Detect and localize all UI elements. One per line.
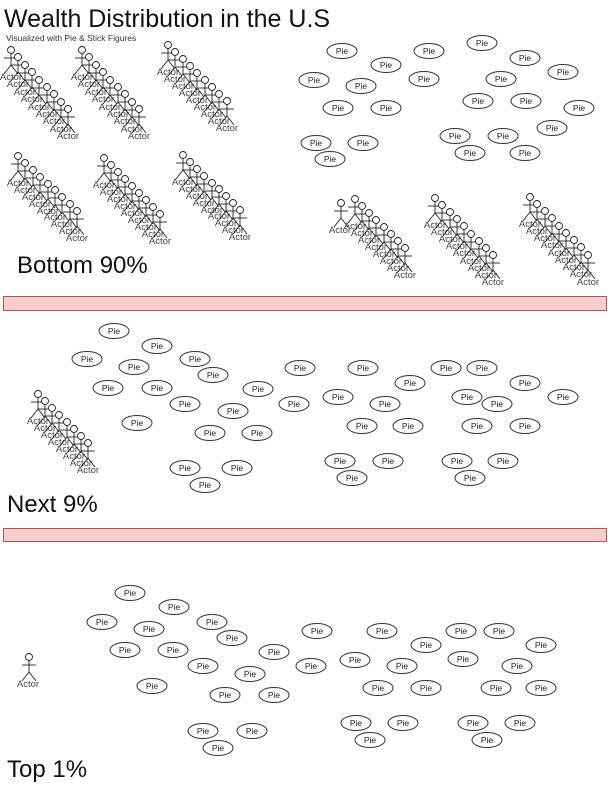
pies top 1%: Pie — [372, 683, 384, 693]
actors group 2: Actor — [121, 124, 143, 135]
pies top 1%: Pie — [376, 626, 388, 636]
pies top 1%: Pie — [420, 640, 432, 650]
pies next 9%: Pie — [294, 363, 306, 373]
pies next 9%: Pie — [252, 384, 264, 394]
pies top 1%: Pie — [146, 681, 158, 691]
pies next 9%: Pie — [519, 421, 531, 431]
pies next 9%: Pie — [451, 456, 463, 466]
pies bottom 90%: Pie — [464, 148, 476, 158]
actors group 9: Actor — [526, 226, 548, 237]
pies next 9%: Pie — [199, 480, 211, 490]
actor single right — [329, 200, 351, 236]
actors group 4: Actor — [37, 206, 59, 217]
pies next 9%: Pie — [288, 399, 300, 409]
actors group 9: Actor — [541, 240, 563, 251]
actors group 6: Actor — [215, 218, 237, 229]
actors group 5: Actor — [121, 208, 143, 219]
actors group 5: Actor — [114, 201, 136, 212]
actors group 8: Actor — [446, 241, 468, 252]
actors group 6: Actor — [172, 177, 194, 188]
label: Top 1%: Top 1% — [7, 756, 87, 783]
pies next 9%: Pie — [402, 421, 414, 431]
pies next 9%: Pie — [497, 456, 509, 466]
pies top 1%: Pie — [535, 683, 547, 693]
pies bottom 90%: Pie — [324, 154, 336, 164]
actors group 2: Actor — [78, 79, 100, 90]
actors group 2: Actor — [128, 131, 150, 142]
pies top 1%: Pie — [212, 743, 224, 753]
actors group 9: Actor — [519, 219, 541, 230]
pies next 9%: Pie — [519, 378, 531, 388]
actors group 2: Actor — [71, 72, 93, 83]
actors group 3 — [157, 42, 238, 134]
divider band 1 — [4, 296, 606, 310]
actors group 5: Actor — [100, 187, 122, 198]
pies bottom 90%: Pie — [380, 60, 392, 70]
actors group 7: Actor — [344, 221, 366, 232]
pies top 1%: Pie — [349, 655, 361, 665]
pies bottom 90%: Pie — [519, 148, 531, 158]
pies top 1%: Pie — [124, 588, 136, 598]
pies next 9%: Pie — [251, 428, 263, 438]
actors group 2: Actor — [92, 94, 114, 105]
actors group 2 — [71, 46, 150, 142]
pies top 1%: Pie — [167, 645, 179, 655]
pies top 1%: Pie — [119, 645, 131, 655]
pies next 9%: Pie — [557, 392, 569, 402]
pies next 9%: Pie — [204, 428, 216, 438]
actors group 7: Actor — [394, 270, 416, 281]
label: Bottom 90%: Bottom 90% — [17, 252, 148, 279]
pies top 1%: Pie — [397, 718, 409, 728]
actors group 9: Actor — [577, 277, 599, 288]
actors group 7: Actor — [351, 228, 373, 239]
pies next 9%: Pie — [231, 463, 243, 473]
pies bottom 90%: Pie — [308, 75, 320, 85]
actors group 6: Actor — [222, 225, 244, 236]
actors group 3: Actor — [194, 102, 216, 113]
actors group 7: Actor — [358, 235, 380, 246]
actors group 6: Actor — [201, 205, 223, 216]
pies next 9%: Pie — [382, 456, 394, 466]
actors group 1: Actor — [43, 116, 65, 127]
actors group 2: Actor — [85, 87, 107, 98]
actors group 5: Actor — [93, 180, 115, 191]
actors group 8: Actor — [431, 227, 453, 238]
pies bottom 90%: Pie — [472, 96, 484, 106]
pies bottom 90%: Pie — [418, 74, 430, 84]
pies next 9%: Pie — [476, 363, 488, 373]
actors group 9 — [519, 194, 599, 288]
actors group 1: Actor — [36, 109, 58, 120]
pies next 9%: Pie — [81, 354, 93, 364]
pies top 1%: Pie — [206, 617, 218, 627]
pies next 9%: Pie — [128, 362, 140, 372]
pies bottom 90%: Pie — [573, 103, 585, 113]
pies next 9%: Pie — [491, 399, 503, 409]
pies bottom 90% — [299, 36, 594, 166]
actor top 1% — [17, 654, 39, 690]
actors group 8: Actor — [460, 256, 482, 267]
pies next 9%: Pie — [332, 392, 344, 402]
actors group 7: Actor — [380, 256, 402, 267]
pies top 1%: Pie — [311, 626, 323, 636]
actors group 10 (next 9%): Actor — [63, 451, 85, 462]
actors group 1: Actor — [14, 87, 36, 98]
actor single right: Actor — [329, 225, 351, 236]
pies top 1%: Pie — [511, 661, 523, 671]
pies next 9%: Pie — [207, 370, 219, 380]
actors group 10 (next 9%) — [27, 390, 99, 476]
actors group 9: Actor — [534, 233, 556, 244]
actors group 1: Actor — [21, 94, 43, 105]
actors group 3: Actor — [208, 116, 230, 127]
actors group 1: Actor — [28, 102, 50, 113]
actors group 2: Actor — [99, 102, 121, 113]
pies top 1%: Pie — [305, 661, 317, 671]
pies top 1%: Pie — [457, 654, 469, 664]
pies top 1%: Pie — [493, 626, 505, 636]
subtitle: Visualized with Pie & Stick Figures — [6, 33, 136, 43]
actors group 5: Actor — [135, 222, 157, 233]
pies top 1% — [87, 586, 556, 756]
actors group 3: Actor — [201, 109, 223, 120]
pies next 9%: Pie — [464, 473, 476, 483]
title: Wealth Distribution in the U.S — [4, 5, 330, 33]
pies bottom 90%: Pie — [495, 74, 507, 84]
actors group 4: Actor — [22, 192, 44, 203]
actors group 10 (next 9%): Actor — [77, 465, 99, 476]
actors group 6 — [172, 152, 251, 243]
divider band 2 — [4, 528, 606, 542]
pies bottom 90%: Pie — [332, 103, 344, 113]
actors group 5: Actor — [149, 236, 171, 247]
actors group 7: Actor — [365, 242, 387, 253]
actors group 10 (next 9%): Actor — [34, 423, 56, 434]
pies next 9%: Pie — [131, 418, 143, 428]
pies next 9%: Pie — [404, 378, 416, 388]
pies next 9%: Pie — [179, 399, 191, 409]
pies top 1%: Pie — [364, 735, 376, 745]
pies top 1%: Pie — [350, 718, 362, 728]
actors group 1: Actor — [7, 79, 29, 90]
actors group 8: Actor — [475, 270, 497, 281]
actors group 7: Actor — [387, 263, 409, 274]
pies next 9%: Pie — [179, 463, 191, 473]
actors group 10 (next 9%): Actor — [70, 458, 92, 469]
pies bottom 90%: Pie — [336, 46, 348, 56]
pies next 9%: Pie — [189, 354, 201, 364]
actors group 3: Actor — [157, 67, 179, 78]
label: Next 9%: Next 9% — [7, 491, 98, 518]
actors group 5: Actor — [142, 229, 164, 240]
pies top 1%: Pie — [396, 661, 408, 671]
pies top 1%: Pie — [268, 690, 280, 700]
pies top 1%: Pie — [467, 718, 479, 728]
actors group 4: Actor — [66, 233, 88, 244]
actors group 4: Actor — [51, 219, 73, 230]
actors group 7 — [344, 196, 416, 281]
actors group 9: Actor — [570, 269, 592, 280]
pies next 9% — [72, 324, 578, 492]
pies next 9%: Pie — [461, 392, 473, 402]
pies top 1%: Pie — [219, 690, 231, 700]
pies top 1%: Pie — [244, 669, 256, 679]
pies next 9%: Pie — [108, 326, 120, 336]
actors group 7: Actor — [373, 249, 395, 260]
actors group 6: Actor — [186, 191, 208, 202]
pies bottom 90%: Pie — [557, 67, 569, 77]
pies next 9%: Pie — [151, 383, 163, 393]
pies next 9%: Pie — [440, 363, 452, 373]
actors group 6: Actor — [179, 184, 201, 195]
pies bottom 90%: Pie — [357, 138, 369, 148]
actors group 2: Actor — [114, 116, 136, 127]
actors group 9: Actor — [555, 255, 577, 266]
actors group 10 (next 9%): Actor — [48, 437, 70, 448]
actors group 5: Actor — [107, 194, 129, 205]
pies bottom 90%: Pie — [355, 81, 367, 91]
pies top 1%: Pie — [96, 617, 108, 627]
pies bottom 90%: Pie — [497, 131, 509, 141]
pies bottom 90%: Pie — [519, 53, 531, 63]
pies bottom 90%: Pie — [476, 38, 488, 48]
pies next 9%: Pie — [356, 421, 368, 431]
actors group 6: Actor — [193, 198, 215, 209]
actor top 1%: Actor — [17, 679, 39, 690]
actors group 8: Actor — [453, 248, 475, 259]
actors group 3: Actor — [172, 81, 194, 92]
pies top 1%: Pie — [246, 726, 258, 736]
actors group 1: Actor — [57, 131, 79, 142]
actors group 10 (next 9%): Actor — [56, 444, 78, 455]
pies next 9%: Pie — [357, 363, 369, 373]
pies top 1%: Pie — [490, 683, 502, 693]
pies top 1%: Pie — [514, 718, 526, 728]
actors group 4: Actor — [7, 178, 29, 189]
actors group 2: Actor — [107, 109, 129, 120]
pies next 9%: Pie — [151, 341, 163, 351]
actors group 4: Actor — [14, 185, 36, 196]
actors group 4: Actor — [29, 199, 51, 210]
pies next 9%: Pie — [334, 456, 346, 466]
actors group 4: Actor — [59, 226, 81, 237]
pies bottom 90%: Pie — [546, 123, 558, 133]
pies bottom 90%: Pie — [310, 138, 322, 148]
pies bottom 90%: Pie — [520, 96, 532, 106]
pies bottom 90%: Pie — [380, 103, 392, 113]
pies top 1%: Pie — [168, 602, 180, 612]
pies top 1%: Pie — [197, 726, 209, 736]
pies top 1%: Pie — [197, 661, 209, 671]
pies next 9%: Pie — [379, 399, 391, 409]
actors group 8 — [424, 194, 504, 288]
pies next 9%: Pie — [102, 383, 114, 393]
actors group 9: Actor — [563, 262, 585, 273]
actors group 8: Actor — [439, 234, 461, 245]
pies bottom 90%: Pie — [449, 131, 461, 141]
pies top 1%: Pie — [481, 735, 493, 745]
actors group 4: Actor — [44, 212, 66, 223]
actors group 9: Actor — [548, 248, 570, 259]
pies top 1%: Pie — [420, 683, 432, 693]
actors group 3: Actor — [186, 95, 208, 106]
pies bottom 90%: Pie — [423, 46, 435, 56]
pies top 1%: Pie — [535, 640, 547, 650]
actors group 1 — [0, 46, 79, 142]
actors group 10 (next 9%): Actor — [27, 416, 49, 427]
actors group 3: Actor — [179, 88, 201, 99]
pies top 1%: Pie — [143, 624, 155, 634]
actors group 10 (next 9%): Actor — [41, 430, 63, 441]
actors group 1: Actor — [50, 124, 72, 135]
actors group 8: Actor — [482, 277, 504, 288]
actors group 8: Actor — [468, 263, 490, 274]
pies next 9%: Pie — [346, 473, 358, 483]
pies next 9%: Pie — [471, 421, 483, 431]
actors group 1: Actor — [0, 72, 22, 83]
actors group 8: Actor — [424, 220, 446, 231]
pies next 9%: Pie — [227, 406, 239, 416]
actors group 6: Actor — [208, 211, 230, 222]
pies top 1%: Pie — [455, 626, 467, 636]
actors group 3: Actor — [216, 123, 238, 134]
pies top 1%: Pie — [226, 633, 238, 643]
pies top 1%: Pie — [268, 647, 280, 657]
actors group 3: Actor — [164, 74, 186, 85]
actors group 6: Actor — [229, 232, 251, 243]
actors group 5: Actor — [128, 215, 150, 226]
actors group 4 — [7, 152, 88, 244]
actors group 5 — [93, 154, 171, 247]
